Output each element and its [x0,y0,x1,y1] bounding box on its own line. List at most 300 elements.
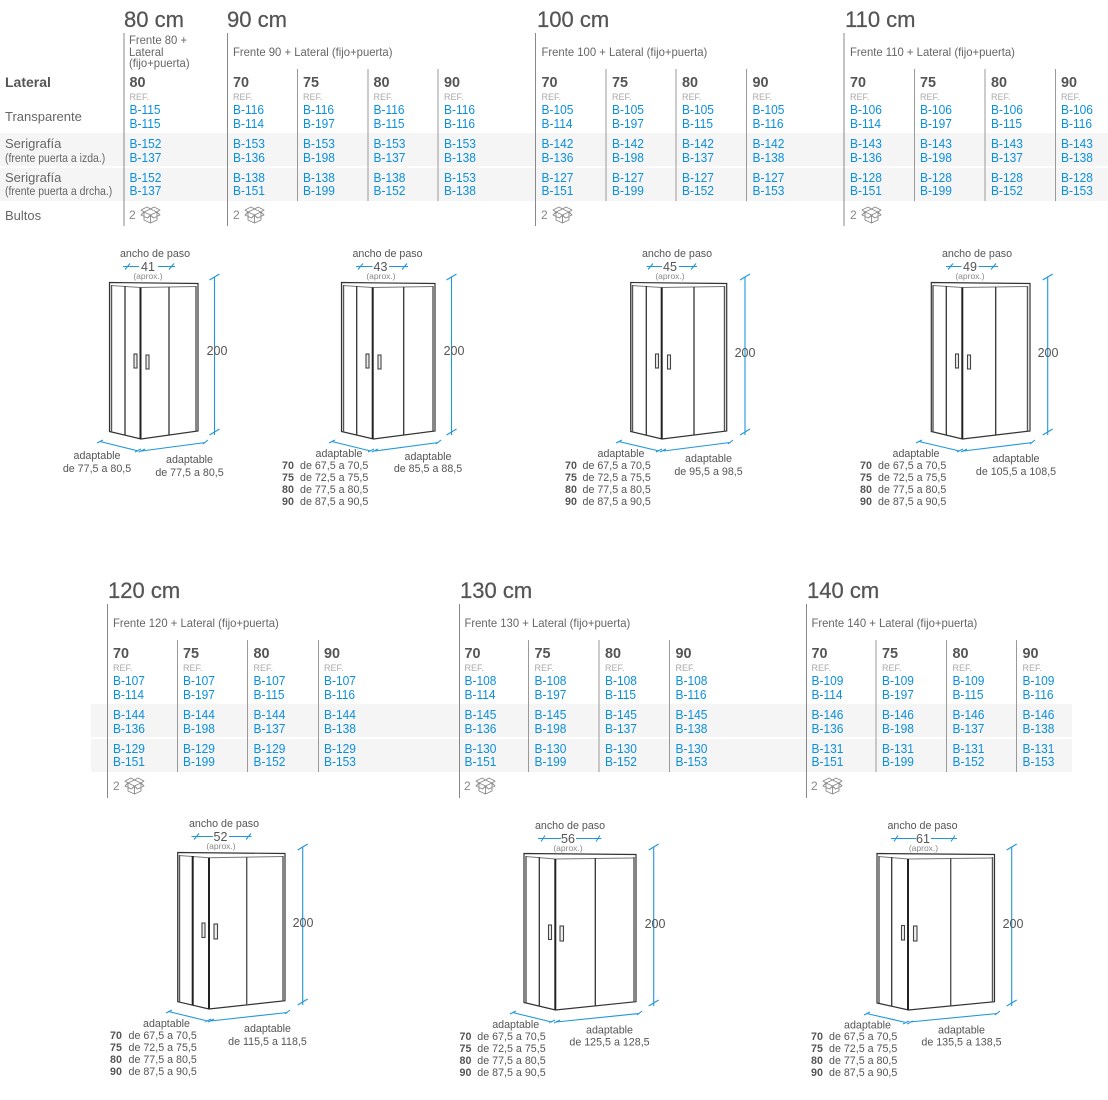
column: 100 / 70: B-136 [542,151,573,165]
bultos 120 with box icon: 2 [113,779,120,793]
column: 130 / 70 [464,646,496,769]
bultos 140 with box icon [811,778,842,794]
column: 130 / 75: B-108 [534,674,566,688]
column: 90 / 70: B-151 [233,184,265,198]
column: 140 / 70: REF. [812,663,831,673]
diagram: 140 cm shower: 200 [1003,917,1023,931]
column: 130 / 70: 70 [464,646,481,662]
column: 110 / 70 [850,75,882,198]
column: 120 / 70: REF. [113,663,133,673]
column: 110 / 70: B-136 [850,151,882,165]
column: 120 / 70: 70 [113,646,129,662]
column: 100 / 80: REF. [682,92,702,102]
column: 90 / 70 [233,75,265,198]
diagram: 140 cm shower: 61 [916,832,930,846]
column: 140 / 70: B-146 [812,708,843,722]
column: 100 / 70 [542,75,573,198]
diagram: 130 cm shower: adaptable [586,1024,633,1036]
column: 100 / 75: B-105 [612,103,644,117]
row labels: (frente puerta a drcha.) [5,185,113,198]
column: 120 / 70: B-114 [113,688,144,702]
column: 140 / 80 [952,646,984,769]
heading: 140 cm: 140 cm [807,578,879,603]
column: 140 / 75: 75 [882,646,898,662]
column: 110 / 90: 90 [1061,75,1077,91]
diagram: 100 cm shower: 80 [565,484,577,496]
column: 100 / 80 [682,75,714,198]
column: 100 / 70: B-142 [542,137,573,151]
column: 130 / 75: B-198 [534,722,566,736]
column: 100 / 90: B-116 [752,117,784,131]
diagram: 100 cm shower: 75 [565,472,577,484]
column: 110 / 70: B-143 [850,137,882,151]
diagram: 100 cm shower: de 87,5 a 90,5 [582,496,651,508]
column: 90 / 70: REF. [233,92,253,102]
column: 110 / 90 [1061,75,1093,198]
column: 130 / 75: B-130 [534,742,566,756]
column: 140 / 70: B-114 [812,688,843,702]
column: 120 / 70: B-107 [113,674,145,688]
diagram: 100 cm shower: 70 [565,460,577,472]
column: 130 / 80: 80 [605,646,621,662]
column: 120 / 80: REF. [254,663,273,673]
column: 130 / 70: B-114 [464,688,496,702]
subtitle: frente 80: (fijo+puerta) [129,56,190,70]
column: 100 / 75: REF. [612,92,632,102]
column: 80 / 80: B-152 [130,171,161,185]
column: 140 / 80: 80 [952,646,969,662]
column: 100 / 70: B-105 [542,103,573,117]
column: 90 / 90: B-138 [444,151,476,165]
column: 140 / 75: REF. [882,663,902,673]
column: 120 / 70: B-144 [113,708,145,722]
column: 110 / 80: REF. [991,92,1011,102]
diagram: 140 cm shower: adaptable [844,1020,891,1032]
diagram: 110 cm shower: de 105,5 a 108,5 [976,466,1056,478]
diagram: 100 cm shower: ancho de paso [642,248,712,260]
diagram: 130 cm shower: de 125,5 a 128,5 [569,1036,650,1048]
column: 90 / 75: B-197 [303,117,335,131]
diagram: 110 cm shower: ancho de paso [942,248,1012,260]
column: 120 / 80: B-129 [254,742,285,756]
column: 120 / 80: 80 [254,646,270,662]
diagram: 90 cm shower: de 77,5 a 80,5 [300,484,368,496]
diagram: 110 cm shower: de 87,5 a 90,5 [878,496,946,508]
bultos 100 with box icon: 2 [541,208,548,222]
diagram: 100 cm shower: de 67,5 a 70,5 [582,460,651,472]
column: 110 / 90: B-143 [1061,137,1093,151]
row labels [5,74,113,223]
row labels: Serigrafía [5,136,62,151]
column: 140 / 80: B-152 [952,755,984,769]
diagram: 100 cm shower: adaptable [598,448,645,460]
column: 100 / 80: 80 [682,75,698,91]
column: 140 / 75 [882,646,914,769]
column: 120 / 75: B-107 [183,674,215,688]
diagram: 80 cm shower: de 77,5 a 80,5 [155,467,224,479]
column: 100 / 70: B-127 [542,171,573,185]
diagram: 120 cm shower: 90 [110,1066,122,1078]
column: 130 / 80: REF. [605,663,625,673]
diagram: 90 cm shower: de 85,5 a 88,5 [394,463,462,475]
diagram: 120 cm shower: 52 [214,830,227,844]
column: 90 / 90: B-116 [444,117,475,131]
diagram: 120 cm shower: de 77,5 a 80,5 [128,1054,197,1066]
column: 120 / 90: 90 [324,646,340,662]
heading: 80 cm: 80 cm [124,7,184,32]
diagram: 110 cm shower [860,248,1058,508]
diagram: 120 cm shower: 80 [110,1054,122,1066]
column: 90 / 75: B-199 [303,184,335,198]
heading: 130 cm: 130 cm [460,578,532,603]
column: 90 / 80: B-137 [374,151,405,165]
diagram: 130 cm shower: adaptable [492,1019,539,1031]
column: 80 / 80: 80 [130,75,146,91]
column: 130 / 90: B-138 [676,722,707,736]
column: 120 / 75 [183,646,215,769]
column: 120 / 80: B-152 [254,755,285,769]
diagram: 90 cm shower: de 87,5 a 90,5 [300,496,368,508]
column: 130 / 75 [534,646,566,769]
column: 100 / 90: B-153 [752,184,784,198]
column: 120 / 75: B-199 [183,755,215,769]
column: 110 / 75: B-199 [920,184,952,198]
diagram: 140 cm shower: (aprox.) [909,843,938,853]
column: 100 / 80: B-137 [682,151,714,165]
column: 90 / 80: B-152 [374,184,405,198]
column: 140 / 90: B-109 [1022,674,1054,688]
column: 130 / 75: B-197 [534,688,566,702]
column: 130 / 75: B-199 [534,755,566,769]
column: 130 / 70: B-145 [464,708,496,722]
column: 110 / 90: REF. [1061,92,1081,102]
column: 100 / 90: B-127 [752,171,784,185]
diagram: 120 cm shower: de 67,5 a 70,5 [128,1030,197,1042]
bultos 130 with box icon [464,778,495,794]
column: 140 / 90: 90 [1022,646,1039,662]
column: 120 / 70 [113,646,145,769]
diagram: 110 cm shower: adaptable [993,453,1040,465]
column: 130 / 75: REF. [534,663,554,673]
column: 110 / 70: B-128 [850,171,882,185]
subtitle: frente 80: Frente 80 + [129,33,187,47]
column: 100 / 90: B-142 [752,137,784,151]
diagram: 80 cm shower [63,248,227,479]
diagram: 90 cm shower: 43 [374,260,387,274]
column: 120 / 80: B-137 [254,722,285,736]
column: 120 / 70: B-129 [113,742,145,756]
bultos 110 with box icon [850,207,881,223]
diagram: 110 cm shower: 49 [963,260,977,274]
diagram: 140 cm shower: 90 [811,1067,823,1079]
column: 100 / 75: B-198 [612,151,644,165]
bultos 80 with box icon: 2 [129,208,136,222]
column: 130 / 75: B-145 [534,708,566,722]
column: 140 / 75: B-198 [882,722,914,736]
column: 90 / 80 [374,75,405,198]
diagram: 140 cm shower: de 67,5 a 70,5 [829,1031,897,1043]
heading: 100 cm: 100 cm [537,7,609,32]
subtitle: frente 120: Frente 120 + Lateral (fijo+puerta) [113,616,279,630]
column: 90 / 80: B-115 [374,117,405,131]
column: 110 / 80: B-115 [991,117,1022,131]
column: 80 / 80: B-115 [130,103,161,117]
diagram: 140 cm shower: de 77,5 a 80,5 [829,1055,897,1067]
column: 120 / 90: B-107 [324,674,356,688]
diagram: 100 cm shower: de 95,5 a 98,5 [674,466,743,478]
column: 140 / 70: B-151 [812,755,843,769]
diagram: 140 cm shower: de 135,5 a 138,5 [921,1036,1002,1048]
diagram: 100 cm shower: adaptable [685,453,732,465]
column: 110 / 75: B-198 [920,151,952,165]
column: 140 / 70: B-136 [812,722,843,736]
column: 140 / 70: 70 [812,646,828,662]
column: 140 / 75: B-197 [882,688,914,702]
column: 130 / 70: REF. [464,663,484,673]
bultos 80 with box icon [129,207,160,223]
column: 90 / 75: B-138 [303,171,335,185]
bultos 100 with box icon [541,207,572,223]
column: 110 / 80: 80 [991,75,1007,91]
column: 120 / 90: B-116 [324,688,355,702]
diagram: 140 cm shower: de 87,5 a 90,5 [829,1067,897,1079]
column: 90 / 70: B-114 [233,117,264,131]
column: 100 / 80: B-152 [682,184,714,198]
column: 90 / 90: 90 [444,75,460,91]
diagram: 130 cm shower: (aprox.) [553,843,583,853]
column: 110 / 70: B-106 [850,103,882,117]
diagram: 90 cm shower: (aprox.) [366,271,396,281]
column: 90 / 75 [303,75,335,198]
diagram: 110 cm shower: adaptable [893,448,940,460]
column: 110 / 75: 75 [920,75,936,91]
column: 140 / 90 [1022,646,1054,769]
heading: 90 cm: 90 cm [227,7,287,32]
column: 130 / 80: B-108 [605,674,637,688]
column: 140 / 75: B-146 [882,708,914,722]
column: 90 / 70: B-138 [233,171,265,185]
column: 110 / 70: B-151 [850,184,882,198]
column: 120 / 90: REF. [324,663,344,673]
diagram: 140 cm shower: adaptable [938,1024,985,1036]
column: 140 / 80: B-109 [952,674,984,688]
column: 90 / 75: B-153 [303,137,335,151]
bultos 110 with box icon: 2 [850,208,857,222]
column: 110 / 75 [920,75,952,198]
diagram: 110 cm shower: 200 [1038,346,1058,360]
column: 100 / 75: B-199 [612,184,644,198]
column: 90 / 80: 80 [374,75,390,91]
column: 140 / 80: REF. [952,663,972,673]
column: 140 / 80: B-146 [952,708,984,722]
column: 130 / 70: B-136 [464,722,496,736]
column: 120 / 90: B-144 [324,708,356,722]
column: 120 / 90 [324,646,356,769]
column: 110 / 80: B-152 [991,184,1023,198]
column: 140 / 75: B-131 [882,742,914,756]
column: 110 / 75: REF. [920,92,940,102]
column: 100 / 70: B-114 [542,117,573,131]
column: 130 / 90: B-108 [676,674,707,688]
column: 120 / 75: B-197 [183,688,215,702]
diagram: 120 cm shower: 200 [293,916,313,930]
column: 90 / 80: REF. [374,92,393,102]
column: 140 / 90: REF. [1022,663,1042,673]
column: 110 / 75: B-143 [920,137,952,151]
column: 140 / 75: B-199 [882,755,914,769]
row labels: Lateral [5,74,51,90]
diagram: 90 cm shower: ancho de paso [352,248,423,260]
column: 130 / 90: B-145 [676,708,707,722]
column: 140 / 70 [812,646,843,769]
column: 130 / 90 [676,646,707,769]
column: 120 / 80: B-107 [254,674,285,688]
row labels: (frente puerta a izda.) [5,152,106,165]
diagram: 90 cm shower: adaptable [405,451,452,463]
column: 90 / 90: B-153 [444,137,476,151]
column: 100 / 80: B-105 [682,103,714,117]
column: 130 / 80: B-152 [605,755,637,769]
column: 100 / 90: 90 [752,75,769,91]
diagram: 120 cm shower: 75 [110,1042,122,1054]
column: 110 / 80 [991,75,1023,198]
diagram: 140 cm shower [811,820,1023,1079]
diagram: 90 cm shower: 80 [282,484,294,496]
column: 110 / 80: B-106 [991,103,1023,117]
column: 110 / 70: REF. [850,92,870,102]
column: 100 / 75: 75 [612,75,628,91]
bultos 130 with box icon: 2 [464,779,471,793]
column: 120 / 90: B-138 [324,722,356,736]
column: 100 / 90: B-138 [752,151,784,165]
bultos 90 with box icon: 2 [233,208,240,222]
diagram: 90 cm shower [282,248,464,508]
column: 100 / 80: B-115 [682,117,713,131]
column: 110 / 75: B-197 [920,117,952,131]
subtitle: frente 140: Frente 140 + Lateral (fijo+puerta) [811,616,977,630]
row labels: Bultos [5,208,42,223]
diagram: 100 cm shower [565,248,755,508]
subtitle: frente 80: Lateral [129,45,164,59]
subtitle: frente 130: Frente 130 + Lateral (fijo+puerta) [465,616,630,630]
column: 100 / 80: B-127 [682,171,714,185]
column: 110 / 80: B-143 [991,137,1023,151]
column: 90 / 80: B-138 [374,171,405,185]
diagram: 130 cm shower: 70 [460,1031,471,1043]
column: 110 / 80: B-137 [991,151,1023,165]
column: 80 / 80: B-115 [130,117,161,131]
diagram: 80 cm shower: (aprox.) [133,271,163,281]
column: 80 / 80: B-152 [130,137,161,151]
heading: 110 cm: 110 cm [845,7,916,32]
diagram: 120 cm shower: de 115,5 a 118,5 [228,1036,307,1048]
row labels: Transparente [5,109,82,124]
diagram: 100 cm shower: 90 [565,496,577,508]
subtitle: frente 90: Frente 90 + Lateral (fijo+puerta) [233,45,393,59]
diagram: 100 cm shower: (aprox.) [655,271,685,281]
diagram: 130 cm shower: 80 [460,1055,471,1067]
diagram: 120 cm shower: 70 [110,1030,122,1042]
column: 90 / 80: B-116 [374,103,405,117]
column: 100 / 70: B-151 [542,184,573,198]
column: 80 / 80: B-137 [130,184,161,198]
diagram: 90 cm shower: 70 [282,460,294,472]
diagram: 80 cm shower: de 77,5 a 80,5 [63,463,131,475]
subtitle: frente 80 [129,33,190,70]
column: 120 / 75: 75 [183,646,199,662]
diagram: 90 cm shower: 90 [282,496,294,508]
column: 120 / 90: B-129 [324,742,356,756]
diagram: 90 cm shower: de 72,5 a 75,5 [300,472,368,484]
column: 130 / 80: B-115 [605,688,636,702]
column: 140 / 90: B-116 [1022,688,1054,702]
diagram: 120 cm shower [110,818,313,1078]
diagram: 110 cm shower: (aprox.) [955,271,985,281]
column: 80 / 80: B-137 [130,151,161,165]
column: 130 / 90: REF. [676,663,695,673]
column: 120 / 75: REF. [183,663,203,673]
diagram: 130 cm shower: 75 [460,1043,471,1055]
diagram: 120 cm shower: ancho de paso [189,818,259,830]
column: 140 / 80: B-115 [952,688,984,702]
column: 130 / 90: B-153 [676,755,707,769]
column: 90 / 80: B-153 [374,137,405,151]
diagram: 80 cm shower: ancho de paso [120,248,190,260]
column: 100 / 80: B-142 [682,137,714,151]
diagram: 120 cm shower: de 87,5 a 90,5 [128,1066,197,1078]
diagram: 140 cm shower: ancho de paso [887,820,958,832]
column: 120 / 75: B-198 [183,722,215,736]
column: 120 / 70: B-136 [113,722,145,736]
column: 100 / 75: B-127 [612,171,644,185]
diagram: 100 cm shower: 200 [735,346,755,360]
column: 120 / 75: B-129 [183,742,215,756]
column: 110 / 90: B-116 [1061,117,1092,131]
column: 90 / 75: REF. [303,92,323,102]
column: 90 / 90: B-116 [444,103,475,117]
column: 140 / 80: B-131 [952,742,984,756]
column: 100 / 90 [752,75,784,198]
column: 130 / 90: B-130 [676,742,707,756]
column: 130 / 75: 75 [534,646,551,662]
column: 90 / 75: 75 [303,75,319,91]
column: 90 / 90 [444,75,476,198]
diagram: 110 cm shower: de 67,5 a 70,5 [878,460,946,472]
diagram: 90 cm shower: de 67,5 a 70,5 [300,460,368,472]
diagram: 130 cm shower: ancho de paso [535,820,605,832]
column: 110 / 90: B-106 [1061,103,1093,117]
column: 90 / 70: 70 [233,75,249,91]
bultos 90 with box icon [233,207,264,223]
column: 110 / 90: B-128 [1061,171,1093,185]
subtitle: frente 100: Frente 100 + Lateral (fijo+puerta) [541,45,707,59]
diagram: 110 cm shower: de 77,5 a 80,5 [878,484,946,496]
column: 100 / 90: B-105 [752,103,784,117]
column: 100 / 75 [612,75,644,198]
column: 90 / 70: B-153 [233,137,265,151]
column: 130 / 80: B-137 [605,722,637,736]
column: 100 / 75: B-197 [612,117,644,131]
column: 140 / 90: B-131 [1022,742,1054,756]
diagram: 130 cm shower: 56 [561,832,575,846]
diagram: 110 cm shower: 70 [860,460,872,472]
diagram: 100 cm shower: de 77,5 a 80,5 [582,484,651,496]
column: 140 / 70: B-109 [812,674,843,688]
column: 130 / 90: 90 [676,646,692,662]
diagram: 130 cm shower: de 72,5 a 75,5 [477,1043,546,1055]
column: 110 / 75: B-128 [920,171,952,185]
diagram: 130 cm shower: de 67,5 a 70,5 [477,1031,546,1043]
